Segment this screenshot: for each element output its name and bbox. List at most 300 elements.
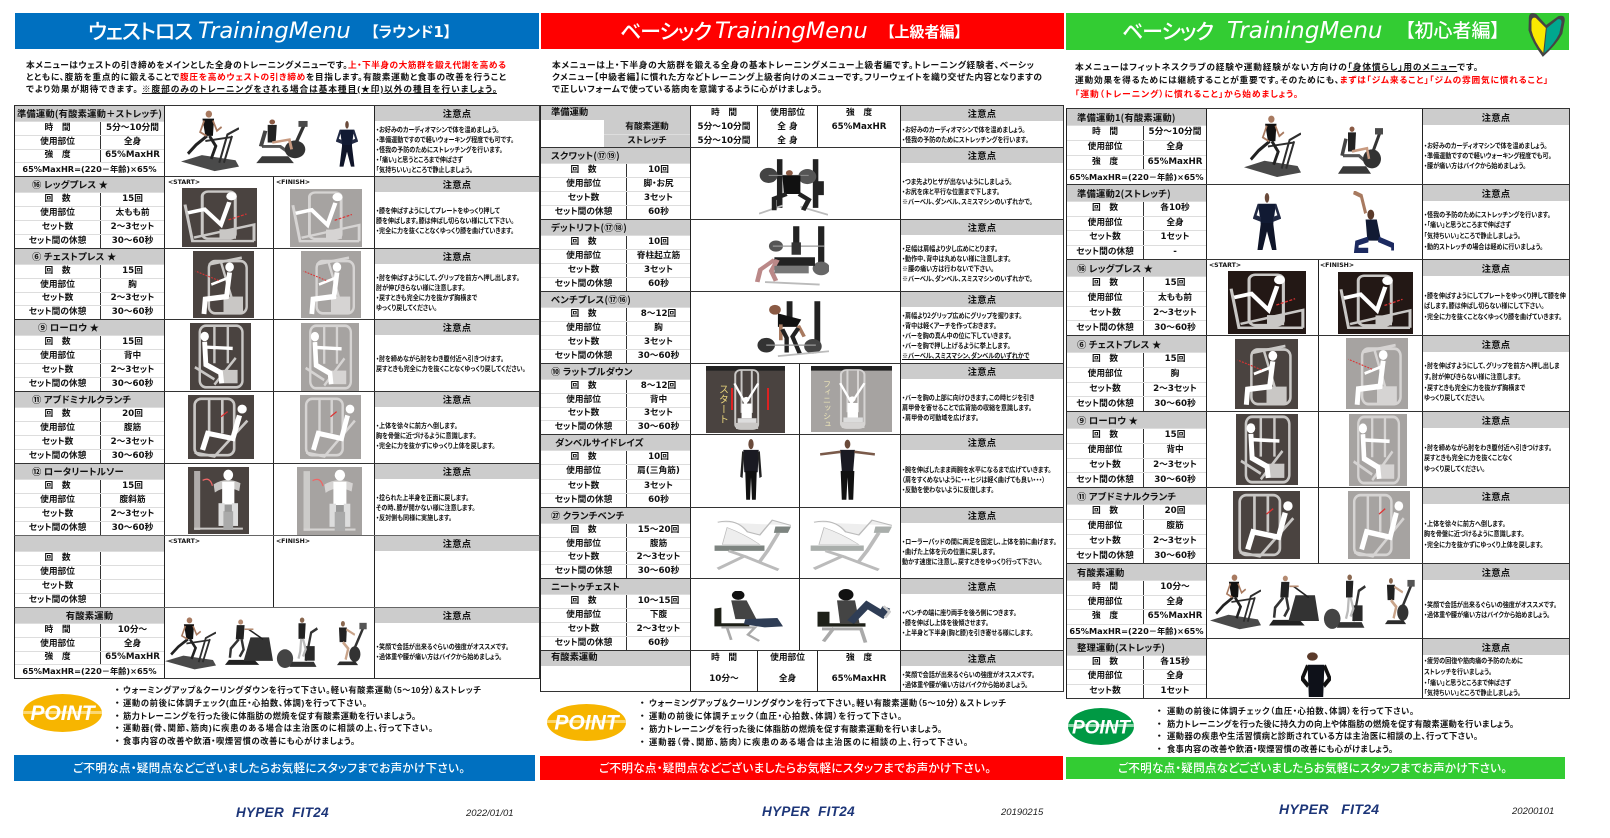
notes: ・「痛い」と思うところまで伸ばさず — [376, 154, 463, 164]
side raise specs: 回 数 — [570, 452, 597, 462]
notes: ゆっくり戻してください。 — [376, 302, 437, 312]
point list: ・ — [1157, 729, 1162, 742]
pictogram: leg press finish — [1338, 272, 1413, 334]
notes: 胸を骨盤に近づけるように意識します。 — [376, 430, 476, 440]
notes: 注意点 — [1482, 186, 1510, 200]
aerobic specs: 有酸素運動 — [66, 608, 113, 622]
start label: <START> — [1209, 262, 1241, 269]
point list: ・ — [1157, 717, 1162, 730]
notes: （肩をすくめないように・・・ヒジは軽く曲げても良い・・・） — [902, 474, 1045, 484]
notes: ・笑顔で会話が出来るぐらいの強度がオススメです。 — [376, 640, 509, 650]
lat pulldown specs: 30～60秒 — [638, 422, 679, 432]
brand: HYPER FIT24 — [1279, 801, 1379, 817]
warm-up 2 specs: 準備運動2(ストレッチ) — [1077, 186, 1171, 200]
notes: 注意点 — [968, 220, 996, 234]
low row specs: 背中 — [1166, 445, 1184, 455]
block: dumbbell side raise — [540, 434, 1064, 507]
notes: ・準備運動ですので軽いウォーキング程度でも可。 — [1424, 150, 1552, 160]
bench press specs: 胸 — [654, 323, 663, 333]
pictogram: crunch start — [188, 395, 254, 459]
block: deadlift — [540, 219, 1064, 291]
date: 20190215 — [1001, 807, 1043, 818]
title banner — [15, 13, 539, 49]
aerobic specs: 全身 — [1166, 597, 1184, 607]
intro text: で正しいフォームで使っている筋肉を意識するように心がけましょう。 — [552, 84, 822, 94]
leg press specs: セット間の休憩 — [1076, 323, 1134, 333]
photo: stretching person — [336, 121, 358, 167]
rotary torso specs: 15回 — [122, 481, 143, 491]
pictogram: chest press finish — [1346, 338, 1408, 409]
squat specs: 60秒 — [648, 207, 669, 217]
pictogram: crunch finish — [300, 395, 361, 459]
panel: basic beginner menu — [1066, 13, 1570, 817]
abdominal crunch specs: ⑪ アブドミナルクランチ — [32, 392, 131, 406]
lat pulldown specs: 8～12回 — [641, 381, 676, 391]
point list: 筋力トレーニングを行った後に持久力の向上や体脂肪の燃焼を促す有酸素運動を行いましょう。 — [1167, 719, 1514, 729]
chest press specs: 2～3セット — [111, 293, 154, 303]
photo: treadmill — [181, 110, 239, 172]
notes: 「気持ちいい」ところで静止しましょう。 — [376, 164, 473, 174]
brand: HYPER FIT24 — [762, 804, 855, 819]
low row specs — [15, 320, 165, 391]
block: chest press — [1066, 335, 1570, 411]
notes: ※腰の痛い方は行わないで下さい。 — [902, 263, 994, 273]
point list: ・ — [115, 721, 120, 734]
warm-up 1 specs: 5分～10分間 — [1149, 127, 1201, 137]
warm-up specs: 全身 — [124, 137, 141, 147]
time column: 時 間 — [711, 108, 737, 118]
block: cool-down stretch — [1066, 638, 1570, 699]
chest press specs: 使用部位 — [40, 280, 75, 290]
panel: basic advanced menu — [540, 13, 1064, 819]
deadlift specs: 3セット — [644, 265, 673, 275]
title text: basic: ベーシック — [620, 16, 711, 46]
cool-down specs: 回 数 — [1092, 657, 1118, 667]
abdominal crunch specs: セット間の休憩 — [29, 451, 86, 461]
illustration: crunch bench start — [714, 520, 791, 571]
aerobic specs: 10分～ — [118, 625, 147, 635]
notes: 動かす速度に注意し、戻すときをゆっくり行って下さい。 — [902, 556, 1042, 566]
warm-up 2 specs: - — [1173, 247, 1177, 257]
abdominal crunch specs: 腹筋 — [1166, 521, 1184, 531]
block: empty exercise slot — [14, 535, 540, 607]
notes: ストレッチを行いましょう。 — [1424, 666, 1492, 676]
pictogram: lat pulldown finish — [811, 366, 892, 432]
notes: ・動的ストレッチの場合は軽めに行いましょう。 — [1424, 241, 1543, 251]
warm-up 1 specs: 65%MaxHR=(220－年齢)×65% — [1069, 172, 1204, 182]
rotary torso specs: 使用部位 — [40, 495, 75, 505]
block: knee to chest — [540, 578, 1064, 650]
chest press specs: 胸 — [1171, 369, 1179, 379]
notes — [1422, 109, 1569, 184]
pictogram: rotary start — [188, 467, 249, 534]
lat pulldown specs: ⑩ ラットプルダウン — [551, 364, 633, 378]
finish label: <FINISH> — [276, 179, 310, 186]
warm-up 1 specs: 全身 — [1166, 142, 1184, 152]
notes: ・肩幅より2グリップ広めにグリップを握ります。 — [902, 310, 1022, 320]
notes: ・バーを胸の真ん中の位に下していきます。 — [902, 330, 1012, 340]
point list: 運動器(骨、関節、筋肉)に疾患のある場合は主治医のに相談の上、行って下さい。 — [123, 723, 433, 733]
notes: ・完全に力を抜くことなくゆっくり膝を曲げていきます。 — [1424, 311, 1562, 321]
point badge — [547, 704, 626, 741]
warm-up specs — [15, 106, 165, 176]
notes: ※バーベル、ダンベル、スミスマシンのいずれかで。 — [902, 196, 1033, 206]
chest press specs: セット数 — [1089, 384, 1121, 394]
notes — [374, 249, 539, 319]
notes — [900, 220, 1063, 291]
point list: 運動の前後に体調チェック(血圧・心拍数、体調)を行って下さい。 — [123, 698, 367, 708]
block: aerobic exercise — [1066, 563, 1570, 638]
notes: ・曲げた上体を元の位置に戻します。 — [902, 546, 996, 556]
warm-up 2 specs: 回 数 — [1092, 203, 1118, 213]
time column: 5分～10分間 — [698, 136, 750, 146]
deadlift specs: 回 数 — [570, 237, 597, 247]
leg press specs — [1067, 260, 1207, 335]
notes — [900, 579, 1063, 650]
chest press specs — [15, 249, 165, 319]
aerobic specs: 有酸素運動 — [1077, 565, 1124, 579]
intro text: 本メニューはウェストの引き締めをメインとした全身のトレーニングメニューです。上・下半身の大筋群を鍛え代謝を高める — [26, 60, 506, 70]
low row specs — [1067, 412, 1207, 487]
notes: 注意点 — [1482, 489, 1510, 503]
photo: lunge stretch — [1353, 191, 1394, 253]
warm-up 1 specs: 準備運動1(有酸素運動) — [1077, 110, 1176, 124]
aerobic row label: 有酸素運動 — [625, 122, 669, 132]
chest press specs: セット数 — [42, 293, 73, 303]
crunch bench specs: 2～3セット — [637, 552, 680, 562]
warm-up 2 specs: 1セット — [1160, 232, 1189, 242]
squat specs: 脚・お尻 — [643, 179, 674, 189]
leg press specs: 2～3セット — [111, 222, 154, 232]
warm-up specs: 強 度 — [44, 150, 71, 160]
bench press specs: セット間の休憩 — [555, 351, 612, 361]
notes: 注意点 — [443, 106, 471, 120]
rotary torso specs: 回 数 — [44, 481, 71, 491]
notes — [900, 508, 1063, 578]
title text: TrainingMenu: TrainingMenu — [715, 18, 868, 44]
photo: knees in — [818, 589, 891, 643]
warm-up 2 specs: 使用部位 — [1088, 218, 1122, 228]
intro text: とともに、腹筋を重点的に鍛えることで腹圧を高めウェストの引き締めを目指します。有酸素運動と食事の改善を行うこと — [26, 72, 506, 82]
crunch bench specs: 回 数 — [570, 525, 597, 535]
low row specs: セット間の休憩 — [1076, 475, 1134, 485]
cool-down specs — [1067, 639, 1207, 698]
rotary torso specs: 30～60秒 — [112, 523, 153, 533]
title banner — [1066, 13, 1569, 50]
photo: bench — [755, 226, 829, 286]
block: abdominal crunch — [14, 391, 540, 463]
deadlift specs: 60秒 — [648, 279, 669, 289]
notes: 注意点 — [968, 579, 996, 593]
finish label: <FINISH> — [1320, 262, 1354, 269]
warm-up 1 specs: 時 間 — [1092, 127, 1118, 137]
warm-up 1 specs: 強 度 — [1092, 157, 1118, 167]
photo: treadmill — [1210, 574, 1261, 630]
notes: ・完全に力を抜くことなくゆっくり膝を曲げていきます。 — [376, 225, 514, 235]
notes: 肘が伸びきらない様に注意します。 — [376, 282, 465, 292]
notes: 注意点 — [1482, 565, 1510, 579]
rotary torso specs: セット数 — [42, 509, 73, 519]
deadlift specs: 10回 — [648, 237, 669, 247]
chest press specs: 30～60秒 — [1154, 399, 1196, 409]
notes: ・完全に力を抜かずにゆっくり上体を戻します。 — [376, 440, 495, 450]
chest press specs: ⑥ チェストプレス ★ — [1077, 337, 1161, 351]
intensity column — [832, 108, 886, 132]
bench press specs — [541, 292, 691, 363]
bench press specs: セット数 — [568, 337, 599, 347]
chest press specs: セット間の休憩 — [1076, 399, 1134, 409]
point badge — [23, 694, 102, 732]
deadlift specs: 脊柱起立筋 — [637, 251, 680, 261]
pictogram: low row finish — [1349, 414, 1407, 486]
aerobic specs: 強 度 — [44, 652, 71, 662]
photo: legs extended — [714, 591, 783, 642]
cool-down specs: 整理運動(ストレッチ) — [1077, 640, 1165, 654]
leg press specs: 30～60秒 — [1154, 323, 1196, 333]
deadlift specs — [541, 220, 691, 291]
brand: HYPER FIT24 — [236, 805, 329, 820]
point list — [115, 683, 481, 747]
side raise specs: 3セット — [644, 481, 673, 491]
notes — [1422, 412, 1569, 487]
start label: <START> — [168, 179, 200, 186]
title text: beginner: 【初心者編】 — [1405, 20, 1500, 42]
notes: ・膝を伸ばすようにしてプレートをゆっくり押して — [376, 205, 500, 215]
deadlift specs: セット数 — [568, 265, 599, 275]
block: aerobic exercise — [14, 607, 540, 679]
footer bar — [540, 756, 1063, 780]
photo: elliptical — [1324, 574, 1366, 629]
notes: ・過体重や腰が痛い方はバイクから始めましょう。 — [1424, 609, 1550, 619]
intensity column: 65%MaxHR — [832, 122, 886, 132]
knee to chest specs: 10～15回 — [638, 596, 679, 606]
point list — [1157, 704, 1514, 755]
leg press specs: セット間の休憩 — [29, 236, 86, 246]
aerobic specs: 使用部位 — [1088, 597, 1122, 607]
notes: ・バーを胸の上部に向けひきます。この時ヒジを引き — [902, 392, 1034, 402]
notes — [1422, 185, 1569, 259]
block: leg press — [14, 176, 540, 248]
notes: 注意点 — [1482, 110, 1510, 124]
notes: 注意点 — [443, 177, 471, 191]
title text: advanced: 【上級者編】 — [887, 23, 962, 41]
squat specs — [541, 148, 691, 219]
crunch bench specs: 腹筋 — [650, 539, 667, 549]
notes: 注意点 — [968, 364, 996, 378]
notes — [900, 106, 1063, 147]
aerobic specs: 時 間 — [44, 625, 71, 635]
intro text — [1075, 62, 1548, 99]
squat specs: 回 数 — [570, 165, 597, 175]
cool-down specs: 各15秒 — [1160, 657, 1190, 667]
chest press specs: ⑥ チェストプレス ★ — [32, 249, 116, 263]
block: crunch bench — [540, 507, 1064, 578]
notes: ・膝を伸ばすようにしてプレートをゆっくり押して膝を伸 — [1424, 290, 1566, 300]
notes: 注意点 — [968, 508, 996, 522]
pictogram: chest press start — [193, 251, 254, 318]
notes: ・反動を使わないように反復します。 — [902, 484, 994, 494]
notes: ・怪我の予防のためにストレッチングを行います。 — [1424, 209, 1551, 219]
lat pulldown specs: 3セット — [644, 408, 673, 418]
pictogram: leg press start — [1228, 271, 1306, 334]
photo: arms down — [740, 439, 762, 500]
notes: ・背中は軽くアーチを作っておきます。 — [902, 320, 997, 330]
warm-up 1 specs: 65%MaxHR — [1148, 157, 1202, 167]
point list: ウォーミングアップ＆クーリングダウンを行って下さい。軽い有酸素運動（5～10分）＆ストレッチ — [649, 698, 1006, 708]
point list: ・ — [640, 696, 645, 709]
cool-down specs: 使用部位 — [1088, 671, 1122, 681]
notes: ・準備運動ですので軽いウォーキング程度でも可です。 — [376, 134, 514, 144]
knee to chest specs: 回 数 — [570, 596, 597, 606]
warm-up 2 specs: 各10秒 — [1160, 203, 1190, 213]
squat specs: 使用部位 — [566, 179, 601, 189]
block: aerobic exercise — [540, 650, 1064, 692]
warm-up 2 specs: セット数 — [1089, 232, 1121, 242]
notes — [374, 320, 539, 391]
point list: ・ — [115, 683, 120, 696]
time column: 時 間 — [711, 653, 737, 663]
block: warm-up 1 — [1066, 108, 1570, 184]
notes: 注意点 — [1482, 261, 1510, 275]
notes: ・つま先よりヒザが出ないようにしましょう。 — [902, 176, 1012, 186]
notes — [900, 292, 1063, 363]
notes: 注意点 — [968, 292, 996, 306]
notes: 注意点 — [1482, 337, 1510, 351]
notes — [374, 464, 539, 535]
notes: 「気持ちいい」ところで静止しましょう。 — [1424, 230, 1521, 240]
warm-up heading: 準備運動 — [551, 107, 588, 118]
notes: ・肘を締めながら肘をわき腹付近へ引きつけます。 — [1424, 442, 1552, 452]
abdominal crunch specs: 回 数 — [1092, 506, 1118, 516]
intensity column: 強 度 — [846, 653, 872, 663]
empty slot specs: セット間の休憩 — [29, 595, 86, 605]
notes — [374, 106, 539, 176]
side raise specs: 60秒 — [648, 495, 669, 505]
squat specs: スクワット(⑰⑲) — [551, 148, 620, 162]
leg press specs: セット数 — [42, 222, 73, 232]
notes: ・捻られた上半身を正面に戻します。 — [376, 492, 469, 502]
side raise specs: セット間の休憩 — [555, 495, 612, 505]
photo: treadmill — [1244, 116, 1301, 177]
notes: 「気持ちいい」ところで静止しましょう。 — [1424, 687, 1521, 697]
pictogram: chest press start — [1235, 339, 1298, 409]
body part column: 全身 — [779, 674, 796, 684]
knee to chest specs: 使用部位 — [566, 610, 601, 620]
date: 2022/01/01 — [466, 808, 514, 819]
squat specs: セット数 — [568, 193, 599, 203]
crunch bench specs — [541, 508, 691, 578]
point list: 運動の前後に体調チェック（血圧・心拍数、体調）を行って下さい。 — [649, 711, 902, 721]
notes — [374, 608, 539, 678]
notes: ゆっくり戻してください。 — [1424, 392, 1485, 402]
photo: recumbent bike — [1338, 126, 1383, 174]
notes — [1422, 260, 1569, 335]
abdominal crunch specs: 腹筋 — [124, 423, 141, 433]
low row specs: セット間の休憩 — [29, 379, 86, 389]
notes: 戻すときも完全に力を抜くことなくゆっくり戻してください。 — [376, 363, 526, 373]
intro text: クメニュー【中級者編】に慣れた方などトレーニング上級者向けのメニューです。フリーウェイトを織り交ぜた内容となりますの — [552, 72, 1042, 82]
abdominal crunch specs: 20回 — [1165, 506, 1185, 516]
squat specs: 10回 — [648, 165, 669, 175]
point badge — [1068, 708, 1134, 745]
abdominal crunch specs: 30～60秒 — [1154, 551, 1196, 561]
notes — [1422, 336, 1569, 411]
intensity column — [832, 652, 886, 684]
abdominal crunch specs — [15, 392, 165, 463]
photo: neck stretch — [1301, 652, 1331, 697]
lat pulldown specs: 背中 — [650, 395, 667, 405]
body part column — [758, 651, 818, 692]
notes: ※バーベル、スミスマシン、ダンベルのいずれかで — [902, 350, 1029, 360]
notes: 注意点 — [443, 249, 471, 263]
block: bench press — [540, 291, 1064, 363]
block: warm-up — [14, 105, 540, 176]
intro text: 本メニューは上・下半身の大筋群を鍛える全身の基本トレーニングメニュー上級者編です。トレーニング経験者、ベーシッ — [552, 60, 1034, 70]
abdominal crunch specs: ⑪ アブドミナルクランチ — [1077, 489, 1176, 503]
chest press specs: 使用部位 — [1088, 369, 1122, 379]
photo: squat — [759, 159, 828, 216]
notes: ・バーを胸で押し上げるように挙上します。 — [902, 340, 1011, 350]
pictogram: crunch finish — [1348, 491, 1410, 559]
crunch bench specs: ㉗ クランチベンチ — [551, 508, 625, 522]
point badge: POINT — [30, 702, 97, 725]
warm-up 2 specs: セット間の休憩 — [1076, 247, 1134, 257]
block: warm-up 2 — [1066, 184, 1570, 259]
notes: ゆっくり戻してください。 — [1424, 463, 1485, 473]
footer bar — [14, 755, 535, 781]
notes: 注意点 — [968, 148, 996, 162]
title text: TrainingMenu: TrainingMenu — [1227, 18, 1382, 44]
abdominal crunch specs: 2～3セット — [1153, 536, 1197, 546]
aerobic specs — [1067, 564, 1207, 638]
notes: ・お好みのカーディオマシンで体を温めましょう。 — [902, 124, 1025, 134]
notes: ・過体重や腰が痛い方はバイクから始めましょう。 — [376, 650, 502, 660]
low row specs: 回 数 — [44, 337, 71, 347]
notes: ・「痛い」と思うところまで伸ばさず — [1424, 676, 1511, 686]
start label: <START> — [168, 538, 200, 545]
low row specs: 背中 — [124, 351, 141, 361]
leg press specs: 回 数 — [1092, 278, 1118, 288]
notes: 注意点 — [1482, 640, 1510, 654]
squat specs: セット間の休憩 — [555, 207, 612, 217]
knee to chest specs: 60秒 — [648, 638, 669, 648]
pictogram: lat pulldown start — [706, 366, 785, 433]
side raise specs: 10回 — [648, 452, 669, 462]
point list: 筋力トレーニングを行った後に体脂肪の燃焼を促す有酸素運動を行いましょう。 — [123, 711, 416, 721]
notes: ・戻すときも完全に力を抜かず胸横まで — [376, 292, 477, 302]
knee to chest specs: 下腹 — [650, 610, 667, 620]
rotary torso specs: 腹斜筋 — [119, 495, 146, 505]
cool-down specs: セット数 — [1089, 686, 1121, 696]
notes: ・完全に力を抜かずにゆっくり上体を戻します。 — [1424, 539, 1543, 549]
leg press specs: 30～60秒 — [112, 236, 153, 246]
low row specs: 30～60秒 — [112, 379, 153, 389]
notes: ・動作中、背中は丸めない様に注意します。 — [902, 253, 1011, 263]
notes: ・笑顔で会話が出来るぐらいの強度がオススメです。 — [1424, 599, 1557, 609]
intensity column: 強 度 — [846, 108, 872, 118]
body part column: 全 身 — [777, 136, 798, 146]
notes: す。肘が伸びきらない様に注意します。 — [1424, 371, 1521, 381]
notes — [1422, 639, 1569, 698]
chest press specs: セット間の休憩 — [29, 307, 86, 317]
abdominal crunch specs: 使用部位 — [40, 423, 75, 433]
chest press specs: 回 数 — [1092, 354, 1118, 364]
notes — [900, 364, 1063, 434]
notes: ・お好みのカーディオマシンで体を温めましょう。 — [376, 124, 499, 134]
low row specs: 使用部位 — [40, 351, 75, 361]
pictogram: low row finish — [301, 323, 359, 391]
lat pulldown specs: セット間の休憩 — [555, 422, 612, 432]
